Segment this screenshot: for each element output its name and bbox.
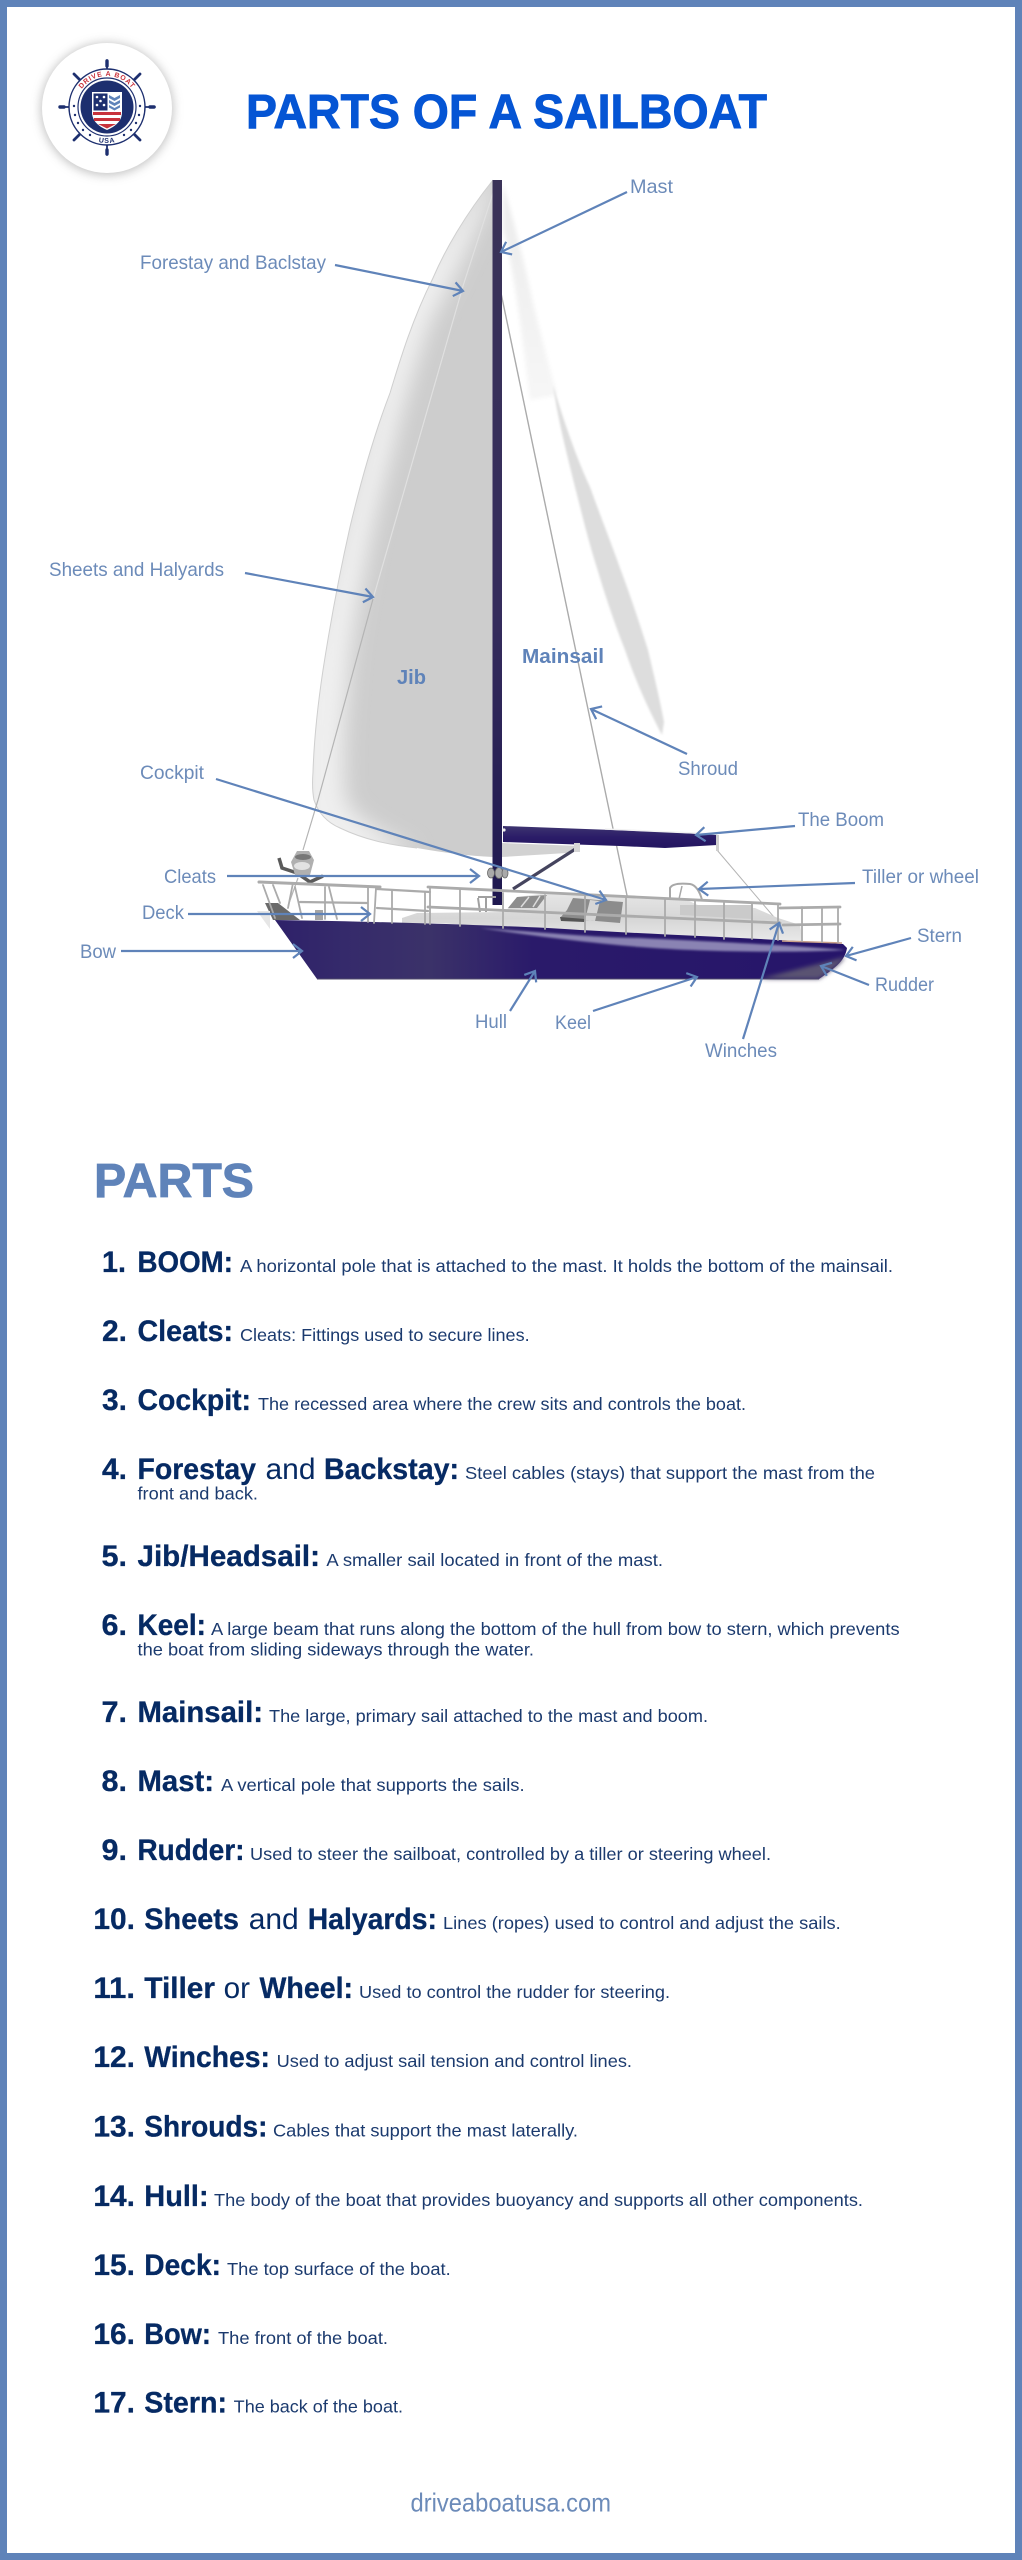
sailboat illustration	[257, 170, 847, 979]
item 12 winches: Winches:	[144, 2041, 270, 2074]
item 5 jib: Jib/Headsail:	[138, 1540, 320, 1573]
arrow: forestay	[335, 265, 463, 291]
item 10 sheets and halyards: Lines (ropes) used to control and adjust the sails.	[443, 1913, 841, 1933]
title: PARTS OF A SAILBOAT	[246, 86, 767, 139]
label: cockpit: Cockpit	[140, 762, 205, 784]
item 4 forestay and backstay: and	[266, 1453, 316, 1486]
label: keel: Keel	[555, 1012, 591, 1034]
item 11 tiller or wheel: 11.	[93, 1972, 135, 2005]
item 3 cockpit: 3.	[102, 1384, 127, 1417]
item 7 mainsail: Mainsail:	[138, 1696, 263, 1729]
item 16 bow	[93, 2318, 388, 2351]
item 4 forestay and backstay	[102, 1453, 875, 1504]
arrow: the boom	[696, 826, 795, 835]
label: tiller or wheel: Tiller or wheel	[862, 866, 979, 888]
icon: ship wheel	[60, 60, 155, 155]
item 7 mainsail: 7.	[102, 1696, 127, 1729]
rigging line from boom	[717, 850, 779, 923]
item 5 jib: 5.	[102, 1540, 127, 1573]
callout arrows	[121, 192, 911, 1039]
item 9 rudder: Used to steer the sailboat, controlled by a tiller or steering wheel.	[250, 1844, 771, 1864]
mast	[492, 180, 502, 905]
arrow: cockpit	[216, 779, 606, 900]
logo arc text: USA	[99, 138, 114, 143]
label: winches: Winches	[705, 1040, 777, 1062]
item 3 cockpit	[102, 1384, 746, 1417]
label: stern: Stern	[917, 925, 962, 947]
item 2 cleats	[102, 1315, 530, 1348]
item 6 keel: the boat from sliding sideways through the water.	[138, 1640, 534, 1660]
item 13 shrouds	[93, 2111, 578, 2144]
cabin	[402, 884, 803, 941]
item 16 bow: The front of the boat.	[218, 2328, 388, 2348]
item 9 rudder: Rudder:	[138, 1834, 244, 1867]
logo arc text: DRIVE A BOAT	[78, 71, 136, 88]
item 5 jib: A smaller sail located in front of the mast.	[326, 1550, 663, 1570]
heading: parts: PARTS	[94, 1155, 254, 1208]
label: mainsail: Mainsail	[522, 646, 604, 668]
item 14 hull: 14.	[93, 2180, 135, 2213]
railings	[259, 882, 840, 942]
item 11 tiller or wheel: Used to control the rudder for steering.	[359, 1982, 670, 2002]
item 2 cleats: Cleats:	[138, 1315, 233, 1348]
item 14 hull: Hull:	[144, 2180, 209, 2213]
hull	[275, 920, 847, 979]
arrow: stern	[846, 938, 911, 956]
item 11 tiller or wheel: Tiller	[144, 1972, 215, 2005]
item 1 boom: 1.	[102, 1246, 126, 1279]
item 6 keel	[102, 1609, 900, 1660]
arrow: sheets and halyards	[245, 573, 373, 597]
item 17 stern: The back of the boat.	[234, 2397, 403, 2417]
mainsail	[503, 184, 664, 735]
forestay fitting and hook	[279, 851, 323, 906]
item 15 deck	[93, 2249, 451, 2282]
item 9 rudder: 9.	[102, 1834, 127, 1867]
item 13 shrouds: Shrouds:	[144, 2111, 268, 2144]
arrow: keel	[593, 977, 697, 1011]
label: shroud: Shroud	[678, 758, 738, 780]
forestay line	[303, 193, 493, 850]
arrow: bow	[121, 950, 302, 952]
item 7 mainsail: The large, primary sail attached to the mast and boom.	[269, 1706, 708, 1726]
item 2 cleats: Cleats: Fittings used to secure lines.	[240, 1325, 530, 1345]
item 11 tiller or wheel	[93, 1972, 670, 2005]
item 15 deck: The top surface of the boat.	[227, 2259, 451, 2279]
bow gear	[257, 903, 323, 929]
logo shield	[80, 80, 134, 134]
mast winches	[488, 868, 508, 878]
item 4 forestay and backstay: front and back.	[138, 1484, 258, 1504]
shroud line	[501, 293, 629, 905]
logo arc text	[78, 71, 136, 143]
item 14 hull: The body of the boat that provides buoyancy and supports all other components.	[214, 2190, 863, 2210]
label: the boom: The Boom	[798, 809, 884, 831]
label: cleats: Cleats	[164, 866, 216, 888]
logo dots	[73, 105, 141, 136]
arrow: tiller or wheel	[699, 883, 855, 889]
boom vang	[513, 848, 577, 889]
item 12 winches	[93, 2041, 632, 2074]
item 1 boom: A horizontal pole that is attached to the mast. It holds the bottom of the mainsail.	[240, 1256, 893, 1276]
label: bow: Bow	[80, 941, 117, 963]
label: deck: Deck	[142, 902, 184, 924]
item 13 shrouds: Cables that support the mast laterally.	[273, 2121, 578, 2141]
item 10 sheets and halyards: Halyards:	[308, 1903, 437, 1936]
item 12 winches: 12.	[93, 2041, 135, 2074]
item 2 cleats: 2.	[102, 1315, 127, 1348]
item 17 stern: Stern:	[144, 2387, 227, 2420]
item 10 sheets and halyards: 10.	[93, 1903, 135, 1936]
label: sheets and halyards: Sheets and Halyards	[49, 559, 224, 581]
label: forestay and backstay: Forestay and Baclstay	[140, 252, 326, 274]
item 8 mast	[102, 1765, 525, 1798]
item 1 boom	[102, 1246, 893, 1279]
arrow: cleats	[227, 875, 479, 877]
jib sail	[300, 170, 580, 860]
item 9 rudder	[102, 1834, 771, 1867]
item 13 shrouds: 13.	[93, 2111, 135, 2144]
item 10 sheets and halyards: Sheets	[144, 1903, 239, 1936]
item 16 bow: 16.	[93, 2318, 135, 2351]
arrow: deck	[188, 913, 370, 915]
item 6 keel: Keel:	[138, 1609, 206, 1642]
item 4 forestay and backstay: Forestay	[138, 1453, 256, 1486]
item 8 mast: A vertical pole that supports the sails.	[221, 1775, 525, 1795]
label: rudder: Rudder	[875, 974, 934, 996]
item 1 boom: BOOM:	[138, 1246, 233, 1279]
item 6 keel: 6.	[102, 1609, 127, 1642]
diagram labels	[49, 176, 979, 1062]
parts list	[93, 1246, 900, 2420]
item 11 tiller or wheel: or	[224, 1972, 250, 2005]
item 14 hull	[93, 2180, 863, 2213]
arrow: rudder	[821, 966, 869, 985]
item 3 cockpit: The recessed area where the crew sits and controls the boat.	[258, 1394, 746, 1414]
item 5 jib	[102, 1540, 663, 1573]
item 15 deck: Deck:	[144, 2249, 221, 2282]
logo badge	[36, 38, 178, 180]
item 15 deck: 15.	[93, 2249, 135, 2282]
item 12 winches: Used to adjust sail tension and control lines.	[277, 2051, 632, 2071]
item 17 stern	[93, 2387, 403, 2420]
label: hull: Hull	[475, 1011, 507, 1033]
footer url: driveaboatusa.com	[410, 2488, 611, 2518]
item 10 sheets and halyards: and	[249, 1903, 299, 1936]
item 8 mast: Mast:	[138, 1765, 214, 1798]
boom	[502, 826, 719, 851]
arrow: winches	[743, 923, 779, 1039]
item 10 sheets and halyards	[93, 1903, 841, 1936]
label: jib: Jib	[397, 667, 426, 689]
item 6 keel: A large beam that runs along the bottom of the hull from bow to stern, which prevents	[211, 1619, 900, 1639]
item 4 forestay and backstay: Steel cables (stays) that support the mast from the	[465, 1463, 875, 1483]
item 17 stern: 17.	[93, 2387, 135, 2420]
item 3 cockpit: Cockpit:	[138, 1384, 251, 1417]
item 11 tiller or wheel: Wheel:	[260, 1972, 353, 2005]
item 4 forestay and backstay: 4.	[102, 1453, 127, 1486]
label: mast: Mast	[630, 176, 674, 198]
arrow: shroud	[591, 709, 687, 754]
item 7 mainsail	[102, 1696, 708, 1729]
arrow: hull	[510, 971, 535, 1011]
item 8 mast: 8.	[102, 1765, 127, 1798]
item 4 forestay and backstay: Backstay:	[324, 1453, 459, 1486]
arrow: mast	[501, 192, 627, 252]
item 16 bow: Bow:	[144, 2318, 211, 2351]
